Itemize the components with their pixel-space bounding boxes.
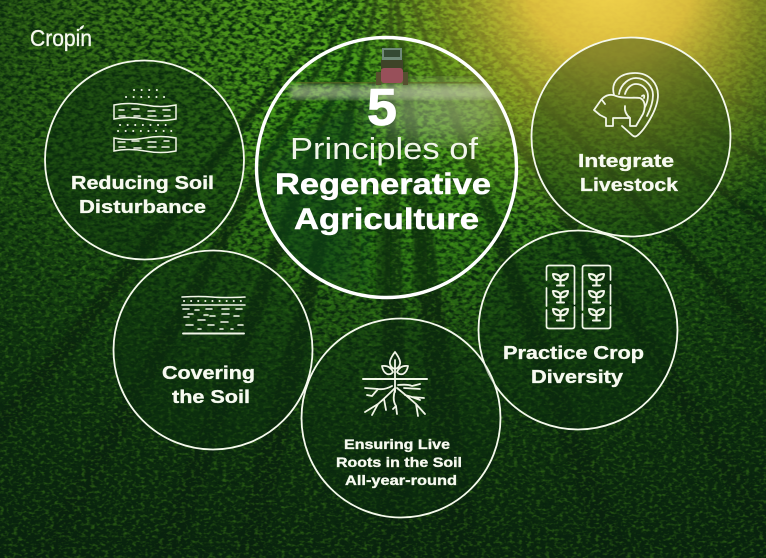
label bbox=[336, 436, 462, 488]
logo: Cropin: Cropin bbox=[30, 25, 92, 51]
panel: Covering the Soil bbox=[114, 250, 312, 450]
icon: pig in location pin bbox=[594, 73, 658, 136]
icon: crop rows bbox=[546, 266, 610, 328]
panel: Integrate Livestock bbox=[532, 38, 730, 236]
icon: covered soil layers bbox=[182, 296, 245, 334]
label bbox=[503, 343, 644, 387]
panel: Reducing Soil Disturbance bbox=[45, 60, 244, 260]
icon: plant with roots bbox=[363, 352, 427, 416]
label: Integrate bbox=[578, 151, 674, 171]
label: Covering bbox=[162, 363, 255, 383]
panel: Ensuring Live Roots bbox=[302, 318, 500, 518]
icon: soil layers bbox=[114, 90, 176, 152]
label bbox=[578, 151, 679, 195]
label: Livestock bbox=[580, 175, 679, 195]
label: the Soil bbox=[172, 387, 250, 407]
icon: logo leaf bbox=[79, 25, 84, 30]
label: Reducing Soil bbox=[71, 173, 214, 193]
label: Diversity bbox=[531, 367, 623, 387]
panel: Practice Crop Diversity bbox=[478, 230, 678, 430]
label: Practice Crop bbox=[503, 343, 644, 363]
heading: title text: Principles of bbox=[290, 131, 478, 166]
heading: title text bbox=[275, 79, 491, 236]
label bbox=[162, 363, 255, 407]
photo detail: crop shadow and spray mist with tractor bbox=[262, 48, 510, 300]
label: Disturbance bbox=[79, 197, 206, 217]
label: All-year-round bbox=[345, 472, 457, 488]
heading: title text: 5 bbox=[367, 79, 397, 137]
label bbox=[71, 173, 214, 217]
panel: centre title circle bbox=[256, 38, 516, 300]
heading: title text: Regenerative bbox=[275, 168, 491, 201]
label: Roots in the Soil bbox=[336, 454, 462, 470]
heading: title text: Agriculture bbox=[294, 203, 479, 236]
label: Ensuring Live bbox=[344, 436, 450, 452]
